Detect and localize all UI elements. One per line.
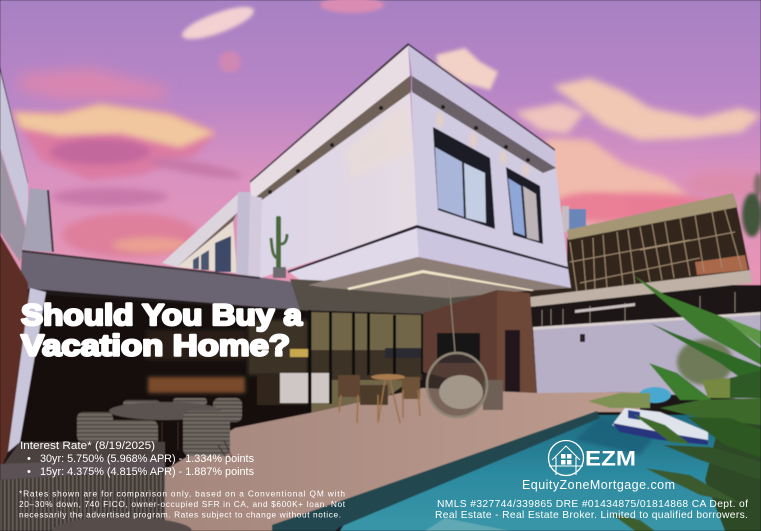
licensing text xyxy=(435,499,748,521)
lower left volume xyxy=(162,192,262,278)
brick pillar xyxy=(423,290,537,405)
icon: cactus xyxy=(271,216,287,278)
right wall xyxy=(411,90,568,268)
right fascia xyxy=(408,43,556,168)
construction building xyxy=(530,173,761,327)
title xyxy=(21,299,302,362)
house upper volume xyxy=(250,43,571,288)
licensing text: NMLS #327744/339865 DRE #01434875/01814868 CA Dept. of xyxy=(437,499,748,510)
disclaimer footnote xyxy=(19,488,346,520)
disclaimer footnote: *Rates shown are for comparison only, based on a Conventional QM with xyxy=(19,488,345,498)
hanging chair xyxy=(427,280,503,417)
right soffit xyxy=(412,76,556,173)
downlights xyxy=(268,105,530,194)
wicker chairs xyxy=(123,398,242,422)
window 1 xyxy=(433,127,495,229)
table xyxy=(109,402,221,420)
pool float xyxy=(612,387,708,445)
disclaimer footnote: 20–30% down, 740 FICO, owner-occupied SFR in CA, and $600K+ loan. Not xyxy=(19,499,346,509)
website URL: EquityZoneMortgage.com xyxy=(522,478,675,492)
woven bench xyxy=(0,442,192,531)
concrete beam xyxy=(20,250,500,314)
title: Should You Buy a xyxy=(21,299,302,332)
title: Vacation Home? xyxy=(21,330,290,362)
left soffit xyxy=(252,75,411,200)
left neighbouring white volume xyxy=(0,67,54,262)
disclaimer footnote: necessarily the advertised program. Rates subject to change without notice. xyxy=(19,510,341,520)
outdoor furniture xyxy=(77,280,503,462)
interest rate block xyxy=(20,440,254,478)
logo: EZM house emblem xyxy=(548,440,636,476)
glass wall xyxy=(20,295,424,470)
plant leaves xyxy=(588,275,761,531)
pool xyxy=(272,411,761,531)
window 2 xyxy=(506,167,543,244)
deck floor xyxy=(165,388,640,531)
logo: EZM house emblem: EZM xyxy=(585,448,636,470)
garden wall xyxy=(533,312,761,400)
balcony band xyxy=(289,227,419,286)
brick wall left xyxy=(0,235,46,470)
left wall xyxy=(260,90,418,278)
interest rate block: • xyxy=(27,453,31,465)
interest rate block: 30yr: 5.750% (5.968% APR) - 1.334% points xyxy=(40,453,254,465)
interest rate block: • xyxy=(27,466,31,478)
dining set on patio xyxy=(338,374,420,423)
clouds xyxy=(13,0,761,257)
left fascia xyxy=(250,43,410,203)
balcony underside xyxy=(308,257,571,298)
interest rate block: 15yr: 4.375% (4.815% APR) - 1.887% points xyxy=(40,466,254,478)
interest rate block: Interest Rate* (8/19/2025) xyxy=(20,440,155,452)
licensing text: Real Estate - Real Estate Broker. Limited to qualified borrowers. xyxy=(435,510,748,521)
